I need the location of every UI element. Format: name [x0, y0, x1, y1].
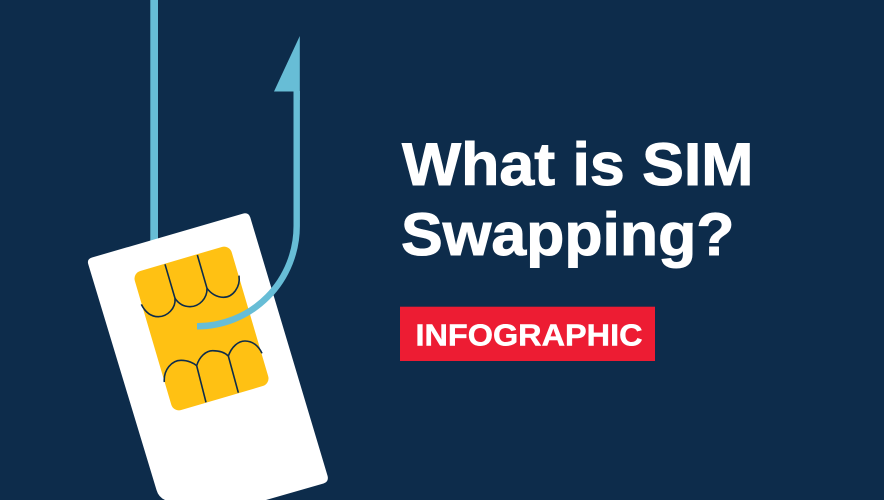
chip contact traces: [141, 255, 262, 402]
fish hook: [197, 36, 300, 326]
infographic badge: [400, 307, 655, 361]
hook barb: [274, 36, 300, 100]
badge background: [400, 307, 655, 361]
title: [401, 130, 754, 268]
fishing line: [150, 0, 158, 245]
chip body: [133, 245, 270, 412]
SIM chip: [133, 245, 270, 412]
title line 2: Swapping?: [401, 200, 734, 268]
hook shaft and bend: [197, 91, 297, 326]
badge label: INFOGRAPHIC: [416, 318, 642, 353]
title line 1: What is SIM: [402, 130, 754, 198]
SIM card: [88, 213, 328, 500]
